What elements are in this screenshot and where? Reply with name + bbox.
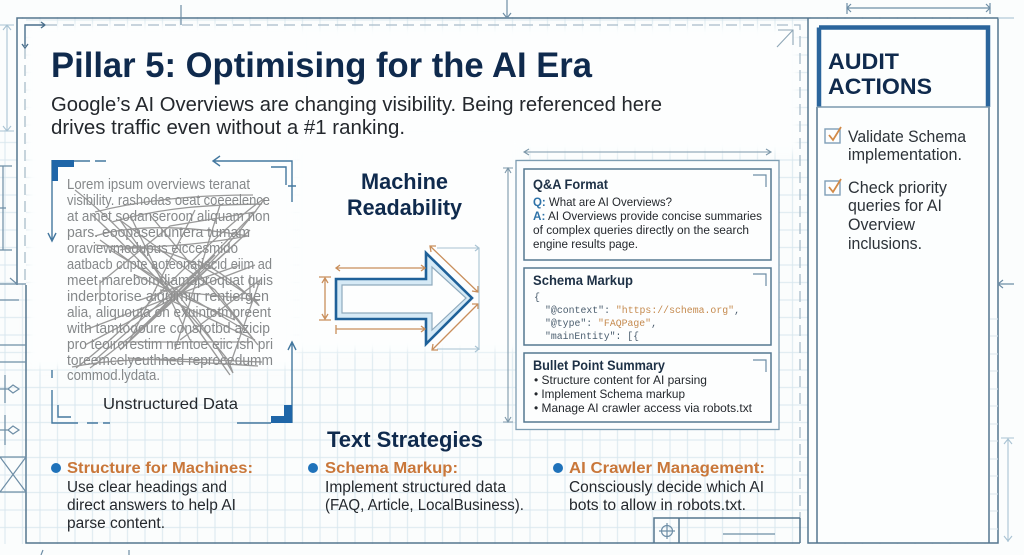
garbled body text: alia, aliquouta on exuintotmpreent xyxy=(67,305,271,321)
card: Q&A format: of complex queries directly on the search xyxy=(533,223,749,237)
icon: title block with crosshair xyxy=(654,518,800,543)
card: schema markup xyxy=(524,268,771,345)
strategy: AI crawler management: bots to allow in robots.txt. xyxy=(569,497,746,514)
garbled body text: toreemcelyeuthhed reprocedumm xyxy=(67,353,273,369)
card: Q&A format: Q&A Format xyxy=(533,177,608,192)
action: check priority queries: inclusions. xyxy=(848,235,922,253)
action: validate schema: implementation. xyxy=(848,146,962,164)
card: schema markup: { xyxy=(534,292,540,304)
garbled body text: visibility. rashodas oeat coeeelence xyxy=(67,193,270,209)
panel: audit actions xyxy=(817,28,990,543)
card: schema markup: Schema Markup xyxy=(533,273,633,288)
card: Q&A format xyxy=(524,169,771,260)
panel: unstructured data xyxy=(48,156,296,423)
card: Q&A format: engine results page. xyxy=(533,237,638,251)
card: Q&A format: A: AI Overviews provide concise summaries xyxy=(533,209,762,223)
intro text xyxy=(51,93,662,139)
heading: machine readability xyxy=(347,169,463,220)
card: bullet summary: • Structure content for AI parsing xyxy=(534,373,707,387)
strategy: AI crawler management: AI Crawler Management: xyxy=(569,460,765,477)
action: check priority queries xyxy=(825,179,948,253)
strategy: structure for machines: Use clear headings and xyxy=(67,479,227,496)
scribbles xyxy=(72,190,265,375)
garbled body text: with tamtoooure consrotbd azicip xyxy=(66,321,270,337)
heading: machine readability: Readability xyxy=(347,195,463,220)
garbled body text xyxy=(66,177,273,384)
garbled body text: commod.lydata. xyxy=(67,368,160,384)
corner brackets xyxy=(48,156,296,423)
icon: top-right corner mark xyxy=(777,30,793,47)
action: check priority queries: Check priority xyxy=(848,179,948,197)
card: schema markup: "@type": "FAQPage", xyxy=(545,318,657,330)
panel: content formats xyxy=(503,149,779,430)
strategy: schema markup: Implement structured data xyxy=(325,479,506,496)
garbled body text: meet marebomdiamaproquat quis xyxy=(67,273,273,289)
action: validate schema: Validate Schema xyxy=(848,128,967,146)
strategy: structure for machines: direct answers to help AI xyxy=(67,497,236,514)
strategy: structure for machines xyxy=(51,460,253,532)
card: bullet summary: Bullet Point Summary xyxy=(533,358,665,373)
strategy: AI crawler management xyxy=(553,460,765,514)
card: schema markup: "@context": "https://schema.org", xyxy=(545,305,740,317)
action: validate schema xyxy=(825,127,967,164)
strategy: AI crawler management: Consciously decide which AI xyxy=(569,479,764,496)
strategy: structure for machines: parse content. xyxy=(67,515,165,532)
strategy: schema markup: (FAQ, Article, LocalBusiness). xyxy=(325,497,524,514)
caption: Unstructured Data xyxy=(103,396,238,413)
right margin and top drawing details xyxy=(503,0,1014,542)
header: ACTIONS xyxy=(828,74,932,99)
garbled body text: inderotorise aiquimur rentiergen xyxy=(67,289,269,305)
card: bullet summary: • Manage AI crawler access via robots.txt xyxy=(534,401,753,415)
heading: machine readability: Machine xyxy=(361,169,448,194)
header: AUDIT xyxy=(828,49,899,74)
card: schema markup: "mainEntity": [{ xyxy=(545,331,639,343)
intro text: Google’s AI Overviews are changing visibility. Being referenced here xyxy=(51,93,662,116)
header xyxy=(817,28,990,107)
garbled body text: pro teoirorestim nentoe eiic ish pri xyxy=(67,337,273,353)
card: Q&A format: Q: What are AI Overviews? xyxy=(533,195,672,209)
heading: text strategies: Text Strategies xyxy=(327,427,483,452)
card: bullet summary xyxy=(524,353,771,422)
garbled body text: oraviewmodupus eiccesmido xyxy=(67,241,238,257)
action: check priority queries: Overview xyxy=(848,216,915,234)
left margin drawing details xyxy=(0,25,129,555)
strategy: structure for machines: Structure for Machines: xyxy=(67,460,253,477)
dimension arrows xyxy=(319,245,479,352)
icon: top-left corner arrows xyxy=(22,22,45,48)
garbled body text: pars. eoopaseuuntera tumam xyxy=(67,225,250,241)
card: bullet summary: • Implement Schema markup xyxy=(534,387,685,401)
garbled body text: aatbacb cupte aoteonatiacid eiim ad xyxy=(67,257,272,273)
title: Pillar 5: Optimising for the AI Era xyxy=(51,46,593,85)
strategy: schema markup xyxy=(308,460,524,514)
garbled body text: at amet sodanseroon aliquam non xyxy=(67,209,270,225)
arrow: machine readability xyxy=(319,245,479,352)
action: check priority queries: queries for AI xyxy=(848,197,942,215)
strategy: schema markup: Schema Markup: xyxy=(325,460,458,477)
intro text: drives traffic even without a #1 ranking. xyxy=(51,116,405,139)
garbled body text: Lorem ipsum overviews teranat xyxy=(67,177,250,193)
